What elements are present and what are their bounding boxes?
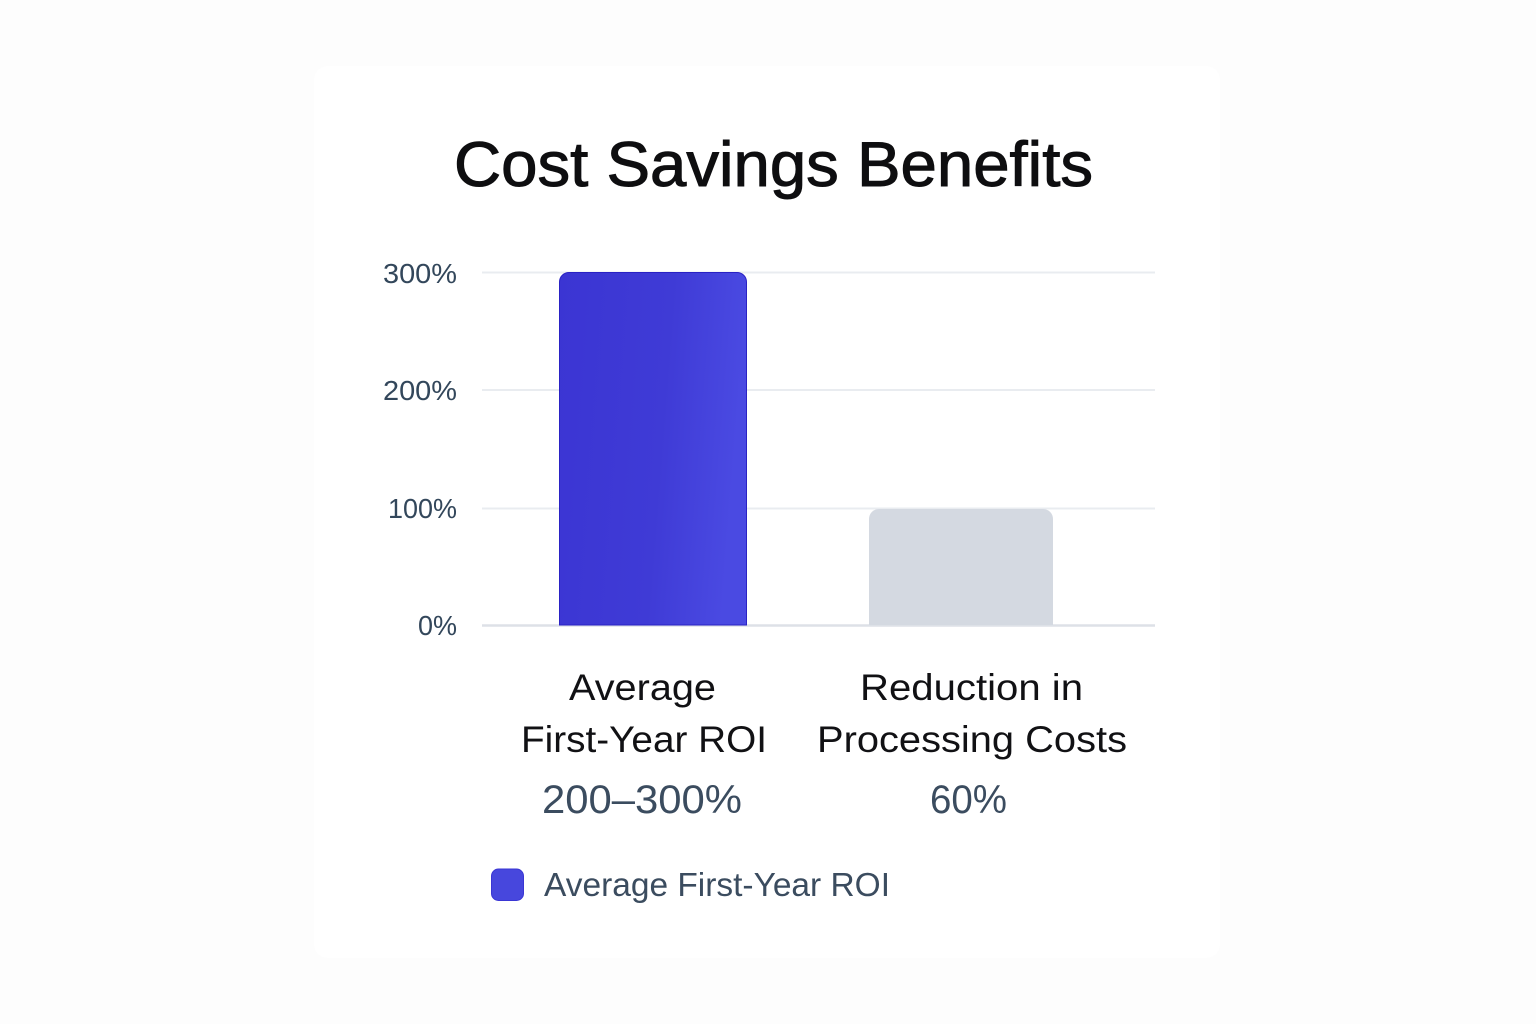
category label: reduction in processing costs: Reduction in bbox=[860, 667, 1083, 708]
bar: reduction in processing costs bbox=[869, 509, 1053, 625]
panel: chart card bbox=[314, 66, 1220, 958]
chart: bar chart bbox=[383, 258, 1155, 641]
legend label: Average First-Year ROI bbox=[544, 866, 890, 903]
legend bbox=[492, 866, 890, 903]
y axis labels bbox=[383, 258, 457, 641]
category label: reduction in processing costs: 60% bbox=[930, 778, 1007, 822]
category label: average first-year ROI: 200–300% bbox=[542, 778, 742, 822]
category label: average first-year ROI bbox=[521, 667, 767, 822]
legend swatch bbox=[492, 869, 524, 900]
y axis labels: 0% bbox=[418, 610, 457, 641]
category label: average first-year ROI: First-Year ROI bbox=[521, 719, 767, 760]
title: Cost Savings Benefits bbox=[454, 130, 1093, 200]
category label: average first-year ROI: Average bbox=[569, 667, 716, 708]
y axis labels: 100% bbox=[388, 493, 457, 524]
category label: reduction in processing costs bbox=[817, 667, 1127, 822]
y axis labels: 300% bbox=[383, 258, 457, 289]
category label: reduction in processing costs: Processing Costs bbox=[817, 719, 1127, 760]
y axis labels: 200% bbox=[383, 375, 457, 406]
bar: average first-year ROI bbox=[560, 272, 746, 625]
